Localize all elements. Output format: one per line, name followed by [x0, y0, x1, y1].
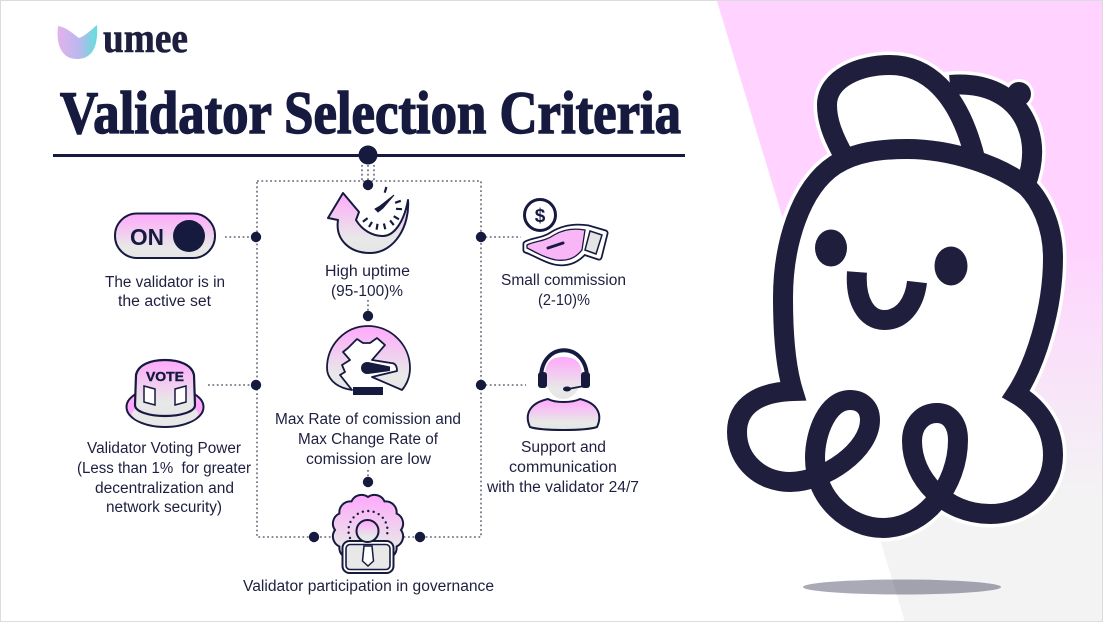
label: active set	[105, 274, 225, 310]
label: voting power: network security)	[106, 499, 222, 516]
icon: uptime clock	[328, 187, 408, 253]
label: support	[486, 439, 639, 496]
label: high uptime: (95-100)%	[331, 283, 403, 300]
label: support: with the validator 24/7	[486, 479, 639, 496]
label: max rate	[275, 411, 461, 468]
icon: speedometer	[327, 326, 410, 395]
logo wordmark: umee	[103, 16, 188, 62]
mascot white halo	[737, 65, 1053, 528]
label: active set: the active set	[118, 293, 212, 310]
label: support: Support and	[521, 439, 606, 456]
icon: support agent	[528, 350, 599, 430]
label: max rate: Max Change Rate of	[298, 431, 439, 448]
icon: vote button: VOTE	[146, 369, 184, 384]
mascot mouth	[857, 272, 917, 320]
background wedge	[717, 1, 1103, 622]
logo	[58, 16, 188, 62]
mascot	[737, 65, 1053, 528]
logo mark	[58, 25, 97, 59]
title: Validator Selection Criteria	[60, 80, 681, 146]
mascot shadow	[803, 580, 1001, 594]
label: small commission	[501, 272, 626, 309]
label: voting power	[77, 440, 251, 516]
mascot hat button	[1007, 82, 1031, 106]
label: governance: Validator participation in governance	[243, 578, 494, 595]
label: max rate: Max Rate of comission and	[275, 411, 461, 428]
icon: governance gear and person	[333, 495, 403, 573]
icon: vote button	[126, 360, 204, 427]
icon: hand with coin	[524, 200, 605, 263]
icon: on toggle: ON	[130, 224, 164, 250]
label: high uptime	[325, 263, 410, 300]
label: voting power: Validator Voting Power	[87, 440, 241, 457]
icon: hand with coin: $	[535, 206, 546, 227]
label: support: communication	[509, 459, 617, 476]
title rule with node	[53, 146, 685, 164]
label: high uptime: High uptime	[325, 263, 410, 280]
connector nodes	[251, 180, 486, 542]
icon: on toggle	[115, 214, 215, 258]
label: small commission: (2-10)%	[538, 292, 590, 309]
mascot outline	[737, 65, 1053, 528]
label: active set: The validator is in	[105, 274, 225, 291]
mascot eyes	[815, 230, 968, 286]
label: small commission: Small commission	[501, 272, 626, 289]
dotted connector frame	[208, 165, 526, 537]
label: max rate: comission are low	[306, 451, 432, 468]
label: voting power: decentralization and	[95, 480, 234, 497]
label: voting power: (Less than 1% for greater	[77, 460, 251, 477]
